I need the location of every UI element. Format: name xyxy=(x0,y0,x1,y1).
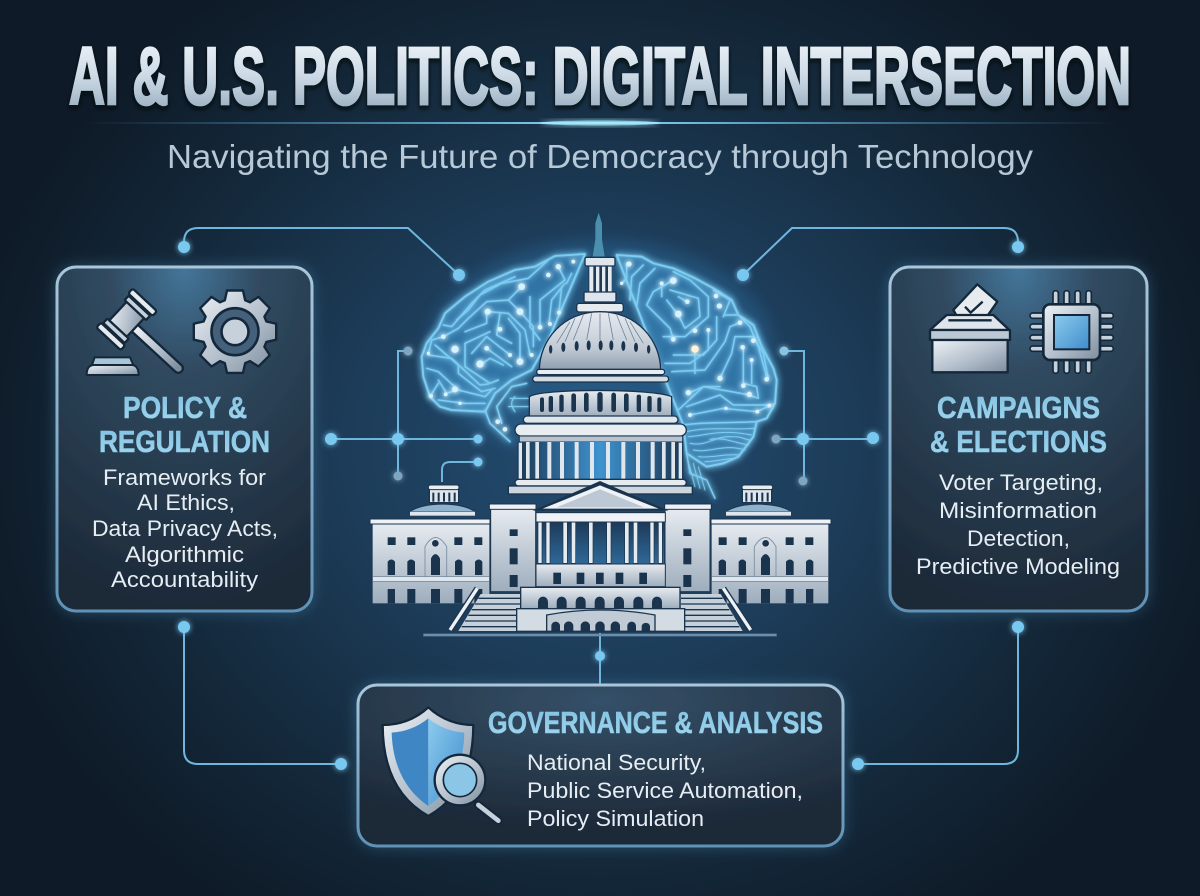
icon: ballot box xyxy=(930,284,1010,372)
body text: National Security, xyxy=(527,750,706,775)
panel: governance and analysis xyxy=(358,685,843,846)
body text xyxy=(527,750,803,831)
heading: REGULATION xyxy=(99,424,270,459)
body text xyxy=(916,470,1120,579)
body text: Public Service Automation, xyxy=(527,778,803,803)
body text xyxy=(92,465,278,592)
capitol: steps and arcade xyxy=(450,587,751,631)
heading xyxy=(99,390,270,459)
icon: gavel xyxy=(87,288,178,375)
capitol: right wing xyxy=(711,485,831,603)
capitol: dome statue and lantern xyxy=(577,213,623,312)
icon: microchip xyxy=(1033,293,1111,371)
heading: GOVERNANCE & ANALYSIS xyxy=(488,705,823,740)
body text: Policy Simulation xyxy=(527,806,704,831)
body text: Voter Targeting, xyxy=(939,470,1103,495)
icon: gear xyxy=(194,290,276,373)
subtitle: Navigating the Future of Democracy through Technology xyxy=(167,138,1034,175)
capitol: ground line xyxy=(423,634,777,636)
body text: Accountability xyxy=(111,567,258,592)
capitol: main dome xyxy=(508,312,692,494)
heading: CAMPAIGNS xyxy=(937,390,1100,425)
body text: Algorithmic xyxy=(125,542,244,567)
body text: AI Ethics, xyxy=(137,490,235,515)
panel: policy and regulation xyxy=(57,267,312,611)
body text: Frameworks for xyxy=(103,465,266,490)
heading: POLICY & xyxy=(123,390,247,425)
connector lines xyxy=(184,228,1018,764)
capitol: central block xyxy=(489,481,711,592)
body text: Misinformation xyxy=(939,498,1097,523)
heading: & ELECTIONS xyxy=(930,424,1107,459)
body text: Data Privacy Acts, xyxy=(92,516,278,541)
panel: campaigns and elections xyxy=(890,267,1147,611)
heading xyxy=(930,390,1107,459)
icon: shield with magnifier xyxy=(383,707,498,821)
title rule xyxy=(80,120,1120,126)
capitol: left wing xyxy=(370,485,490,603)
central illustration: brain and capitol xyxy=(370,213,831,636)
body text: Predictive Modeling xyxy=(916,554,1120,579)
brain: circuit hemispheres xyxy=(415,240,777,498)
connector nodes xyxy=(178,241,1024,770)
body text: Detection, xyxy=(967,526,1070,551)
